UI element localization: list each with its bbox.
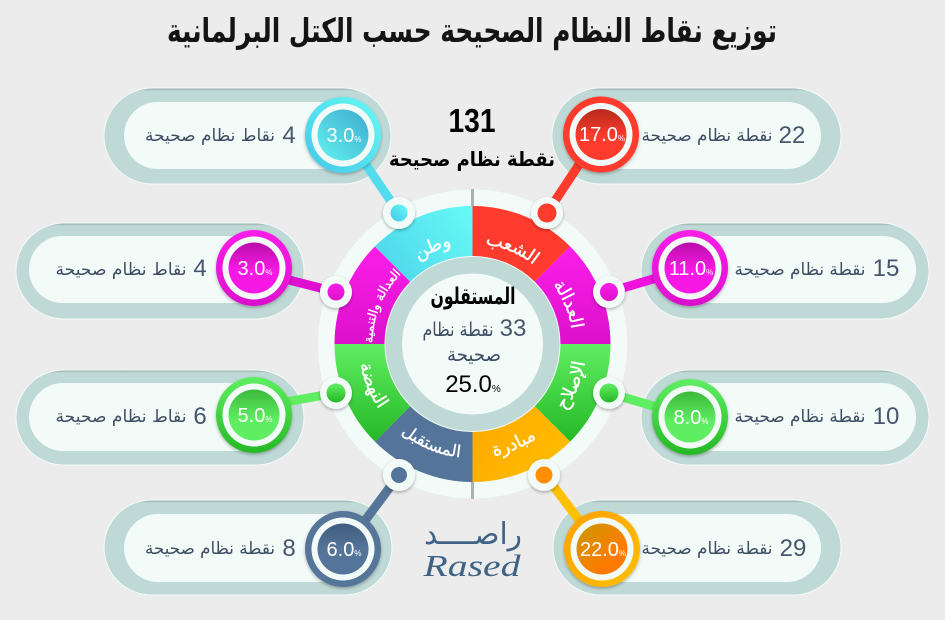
panel: pill bottom right مبادرة: 22.0% (580, 539, 626, 561)
panel: pill right lower الإصلاح: نقطة نظام صحيحة (734, 407, 866, 427)
logo: Rased: Rased (422, 548, 521, 583)
panel: pill bottom left المستقبل: نقطة نظام صحيحة (145, 539, 275, 559)
panel: pill bottom left المستقبل: 6.0% (327, 539, 361, 561)
panel: pill top left وطن (104, 88, 399, 213)
segment: العدالة والتنمية (334, 246, 472, 344)
panel: pill left lower النهضة: 6 (193, 403, 207, 430)
panel: pill left lower النهضة: 5.0% (238, 405, 272, 427)
panel: pill right upper العدالة: 11.0% (669, 258, 713, 280)
segment labels: المستقبل (402, 428, 460, 458)
panel: pill top right الشعب (547, 88, 841, 213)
segment labels: الشعب (486, 239, 541, 264)
panel: pill top left وطن: 3.0% (327, 125, 361, 147)
segment labels: العدالة والتنمية (366, 268, 400, 342)
donut chart (318, 189, 627, 499)
panel: pill left lower النهضة: نقاط نظام صحيحة (56, 407, 186, 427)
panel: pill left upper العدالة والتنمية (16, 223, 336, 319)
panel: pill left upper العدالة والتنمية: 4 (193, 255, 207, 282)
center text: المستقلون (422, 284, 526, 398)
segment: المستقبل (375, 344, 472, 482)
center text: المستقلون: المستقلون (430, 284, 516, 310)
panel: pill top left وطن: 4 (282, 122, 296, 149)
panel: pill right lower الإصلاح: 8.0% (674, 407, 708, 429)
panel: pill right upper العدالة: 15 (873, 255, 899, 282)
segment labels: وطن (418, 238, 450, 262)
segment labels: العدالة (554, 282, 585, 328)
panel: pill left lower النهضة (16, 370, 336, 465)
segment: النهضة (334, 344, 472, 442)
total count: 131 (448, 102, 496, 139)
panel: pill bottom right مبادرة: 29 (780, 535, 806, 562)
panel: pill top right الشعب: 22 (779, 122, 805, 149)
logo: Rased: راصــــد (424, 517, 522, 552)
segment: مبادرة (472, 344, 570, 482)
segment: الإصلاح (472, 344, 610, 442)
panel: pill right upper العدالة (609, 223, 929, 319)
panel: pill right upper العدالة: نقطة نظام صحيحة (734, 260, 866, 280)
segment: الشعب (472, 206, 570, 344)
segment labels (361, 238, 586, 458)
center text: المستقلون: 33 (500, 315, 526, 342)
panel: pill left upper العدالة والتنمية: 3.0% (238, 258, 272, 280)
panel: pill bottom right مبادرة (545, 475, 841, 595)
center text: المستقلون: صحيحة (447, 344, 501, 366)
segment labels: الإصلاح (560, 361, 586, 410)
segment: العدالة (472, 246, 610, 344)
segment: وطن (375, 206, 472, 344)
total count (389, 102, 555, 171)
segment labels: مبادرة (494, 434, 535, 458)
panel: pill right lower الإصلاح: 10 (873, 403, 899, 430)
panel: pill right lower الإصلاح (609, 370, 929, 465)
total count: نقطة نظام صحيحة (389, 147, 555, 171)
logo: Rased (422, 517, 522, 583)
panel: pill top right الشعب: 17.0% (579, 124, 625, 146)
center text: المستقلون: نقطة نظام (422, 319, 494, 341)
center text: المستقلون: 25.0% (445, 371, 501, 398)
panel: pill bottom left المستقبل (104, 475, 399, 595)
panel: pill top right الشعب: نقطة نظام صحيحة (642, 126, 772, 146)
segment labels: النهضة (361, 364, 390, 408)
panel: pill left upper العدالة والتنمية: نقاط نظام صحيحة (56, 260, 186, 280)
panel: pill bottom left المستقبل: 8 (282, 535, 296, 562)
panel: pill bottom right مبادرة: نقطة نظام صحيحة (642, 539, 772, 559)
connector nodes (320, 197, 625, 491)
panel: pill top left وطن: نقاط نظام صحيحة (145, 126, 275, 146)
center ring (385, 256, 560, 432)
